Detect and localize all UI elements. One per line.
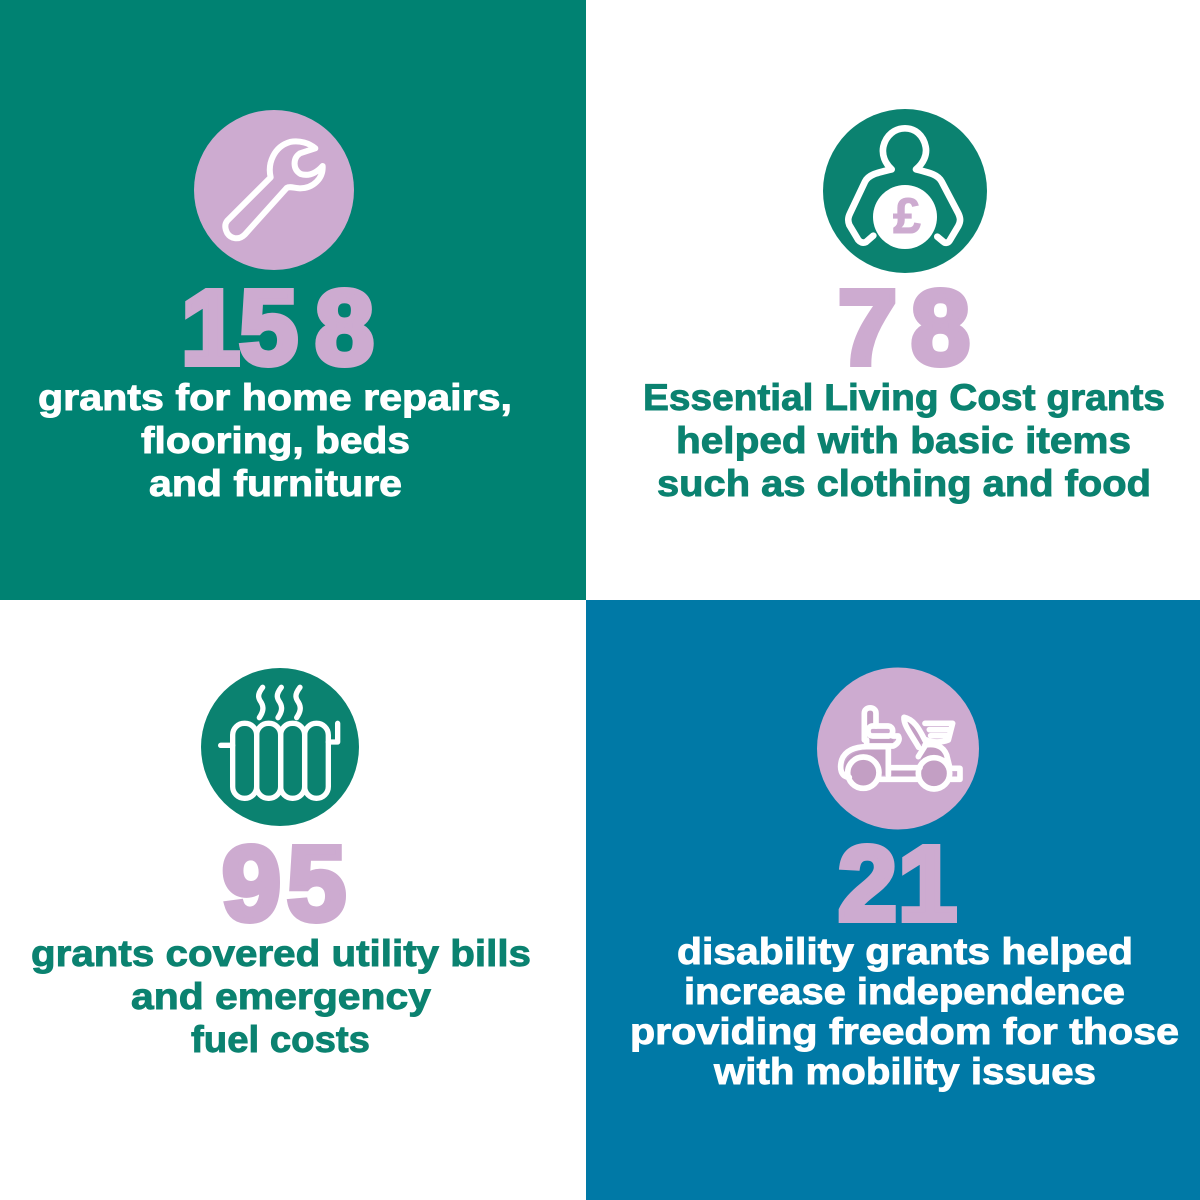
text: disability grants description: providing freedom for those bbox=[630, 1011, 1179, 1052]
text: utility bills description: and emergency bbox=[131, 976, 431, 1017]
text: home repairs description bbox=[38, 377, 512, 504]
text: home repairs description: and furniture bbox=[149, 463, 402, 504]
text: disability grants description: with mobility issues bbox=[713, 1051, 1096, 1092]
text: disability grants description: disability grants helped bbox=[677, 931, 1133, 972]
panel: home repairs bbox=[0, 0, 586, 600]
panel: utility bills bbox=[0, 600, 586, 1200]
number: 95: 95 bbox=[222, 825, 346, 943]
text: home repairs description: grants for home repairs, bbox=[38, 377, 512, 418]
icon: person holding pound coin: £ bbox=[893, 188, 921, 244]
text: disability grants description: increase independence bbox=[684, 971, 1125, 1012]
text: utility bills description: fuel costs bbox=[191, 1019, 370, 1060]
number: 21: 21 bbox=[838, 825, 957, 943]
panel: disability grants bbox=[586, 600, 1200, 1200]
icon: person holding pound coin bbox=[823, 109, 987, 273]
icon: mobility scooter bbox=[817, 668, 979, 830]
text: essential living cost description bbox=[643, 377, 1165, 504]
panel: essential living costs bbox=[586, 0, 1200, 600]
number: 158: 158 bbox=[181, 269, 374, 387]
text: home repairs description: flooring, beds bbox=[141, 420, 410, 461]
text: utility bills description: grants covered utility bills bbox=[31, 933, 531, 974]
text: utility bills description bbox=[31, 933, 531, 1060]
number: 78: 78 bbox=[838, 269, 970, 387]
text: disability grants description bbox=[630, 931, 1179, 1092]
icon: radiator bbox=[201, 668, 359, 826]
text: essential living cost description: Essential Living Cost grants bbox=[643, 377, 1165, 418]
text: essential living cost description: helped with basic items bbox=[676, 420, 1131, 461]
icon: wrench bbox=[194, 110, 354, 270]
text: essential living cost description: such as clothing and food bbox=[657, 463, 1151, 504]
